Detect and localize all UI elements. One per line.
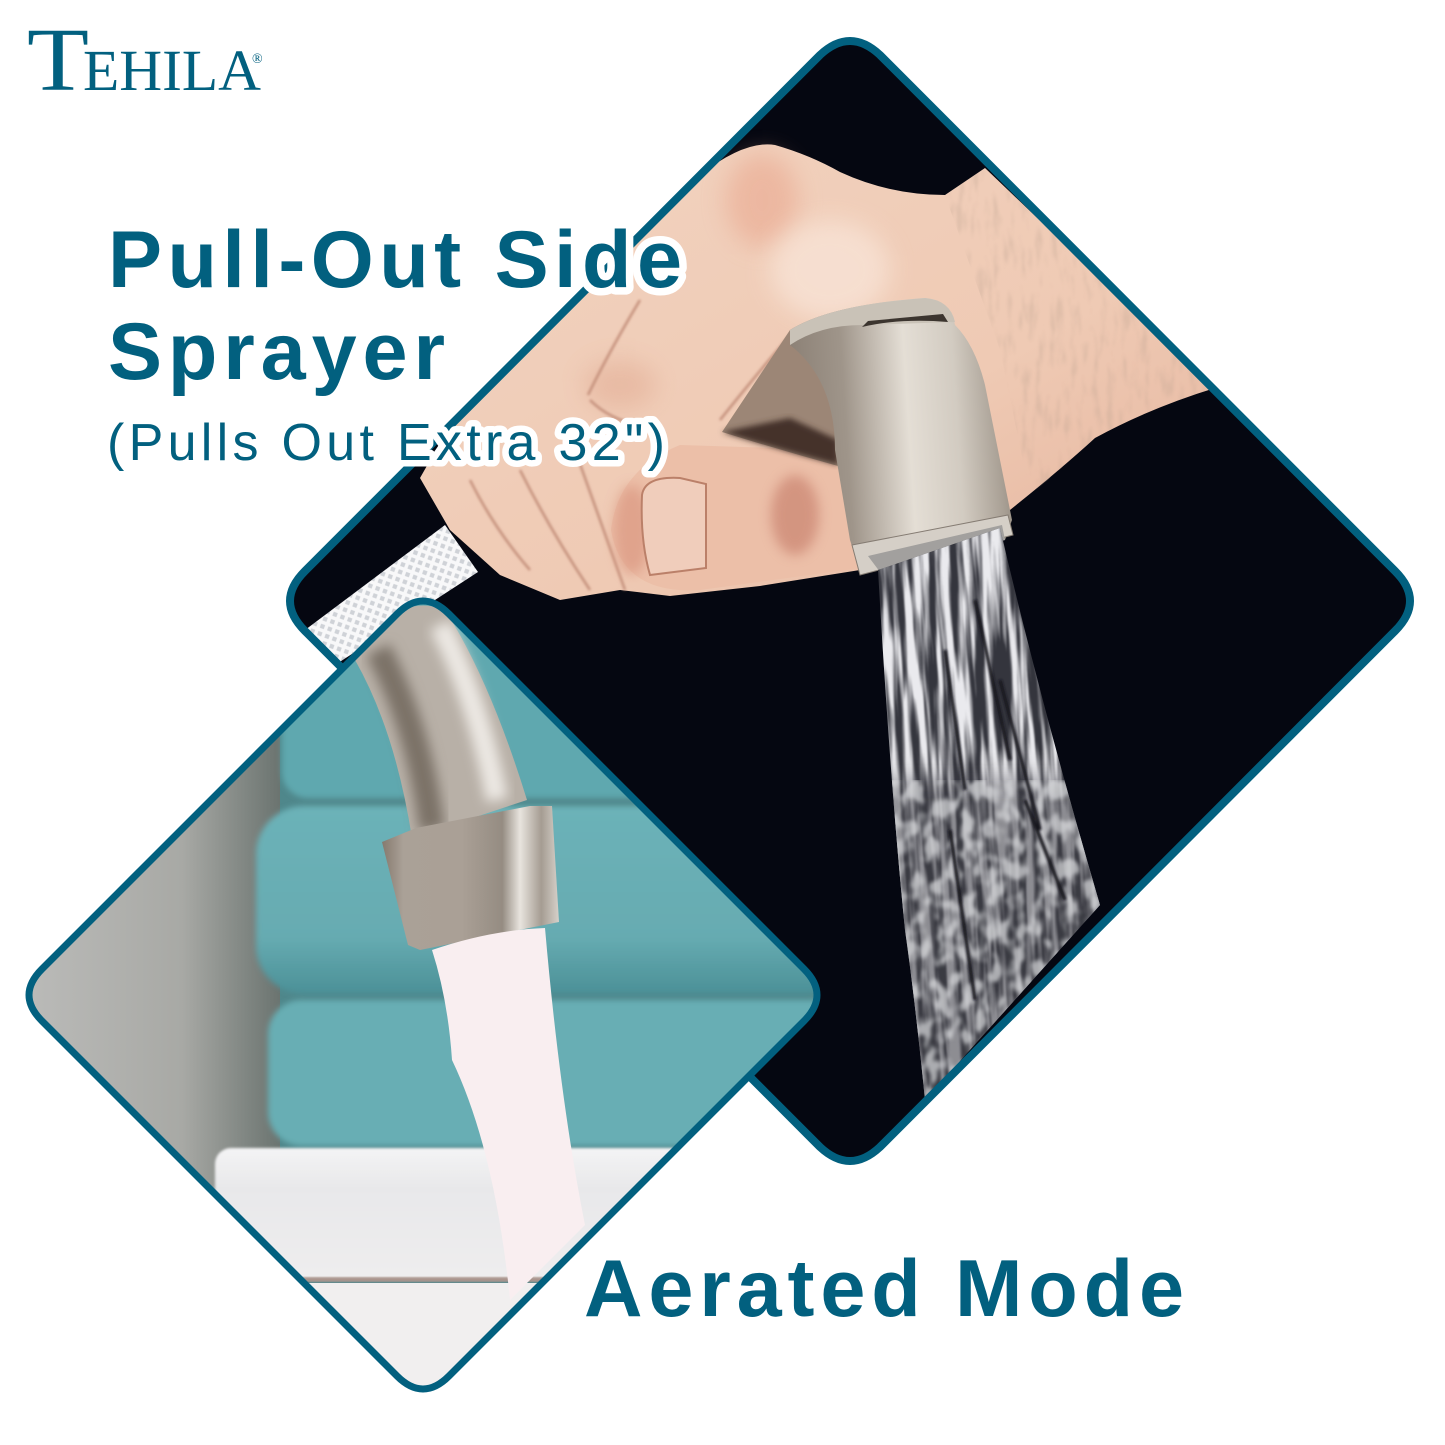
aerator collar — [382, 806, 559, 950]
water spray — [878, 528, 1100, 1097]
logo: ® — [252, 52, 263, 67]
hose — [305, 525, 478, 665]
subtitle: (Pulls Out Extra 32") — [107, 414, 665, 472]
thumb — [611, 445, 860, 590]
towels — [279, 604, 630, 800]
label: Aerated Mode: Aerated Mode — [584, 1244, 1184, 1334]
title: Pull-Out Side Sprayer — [108, 215, 682, 397]
title: Pull-Out Side Sprayer: Pull-Out Side — [108, 215, 682, 305]
title: Pull-Out Side Sprayer: Sprayer — [108, 307, 445, 397]
water stream — [432, 928, 585, 1300]
white counter — [214, 1146, 674, 1279]
knuckle blush — [726, 154, 798, 246]
panel: aerated faucet photo diamond — [14, 588, 858, 1408]
spout — [355, 606, 527, 838]
forearm and hand — [420, 144, 1215, 600]
logo: EHILA — [83, 38, 261, 103]
finger creases — [470, 300, 795, 590]
sprayer head — [790, 302, 1012, 546]
logo: T — [27, 11, 89, 110]
arm hair — [950, 174, 1193, 489]
thumbnail — [642, 478, 706, 575]
panel: sprayer photo diamond — [270, 20, 1430, 1180]
sprayer elbow shadow — [722, 330, 838, 466]
logo — [27, 11, 263, 110]
